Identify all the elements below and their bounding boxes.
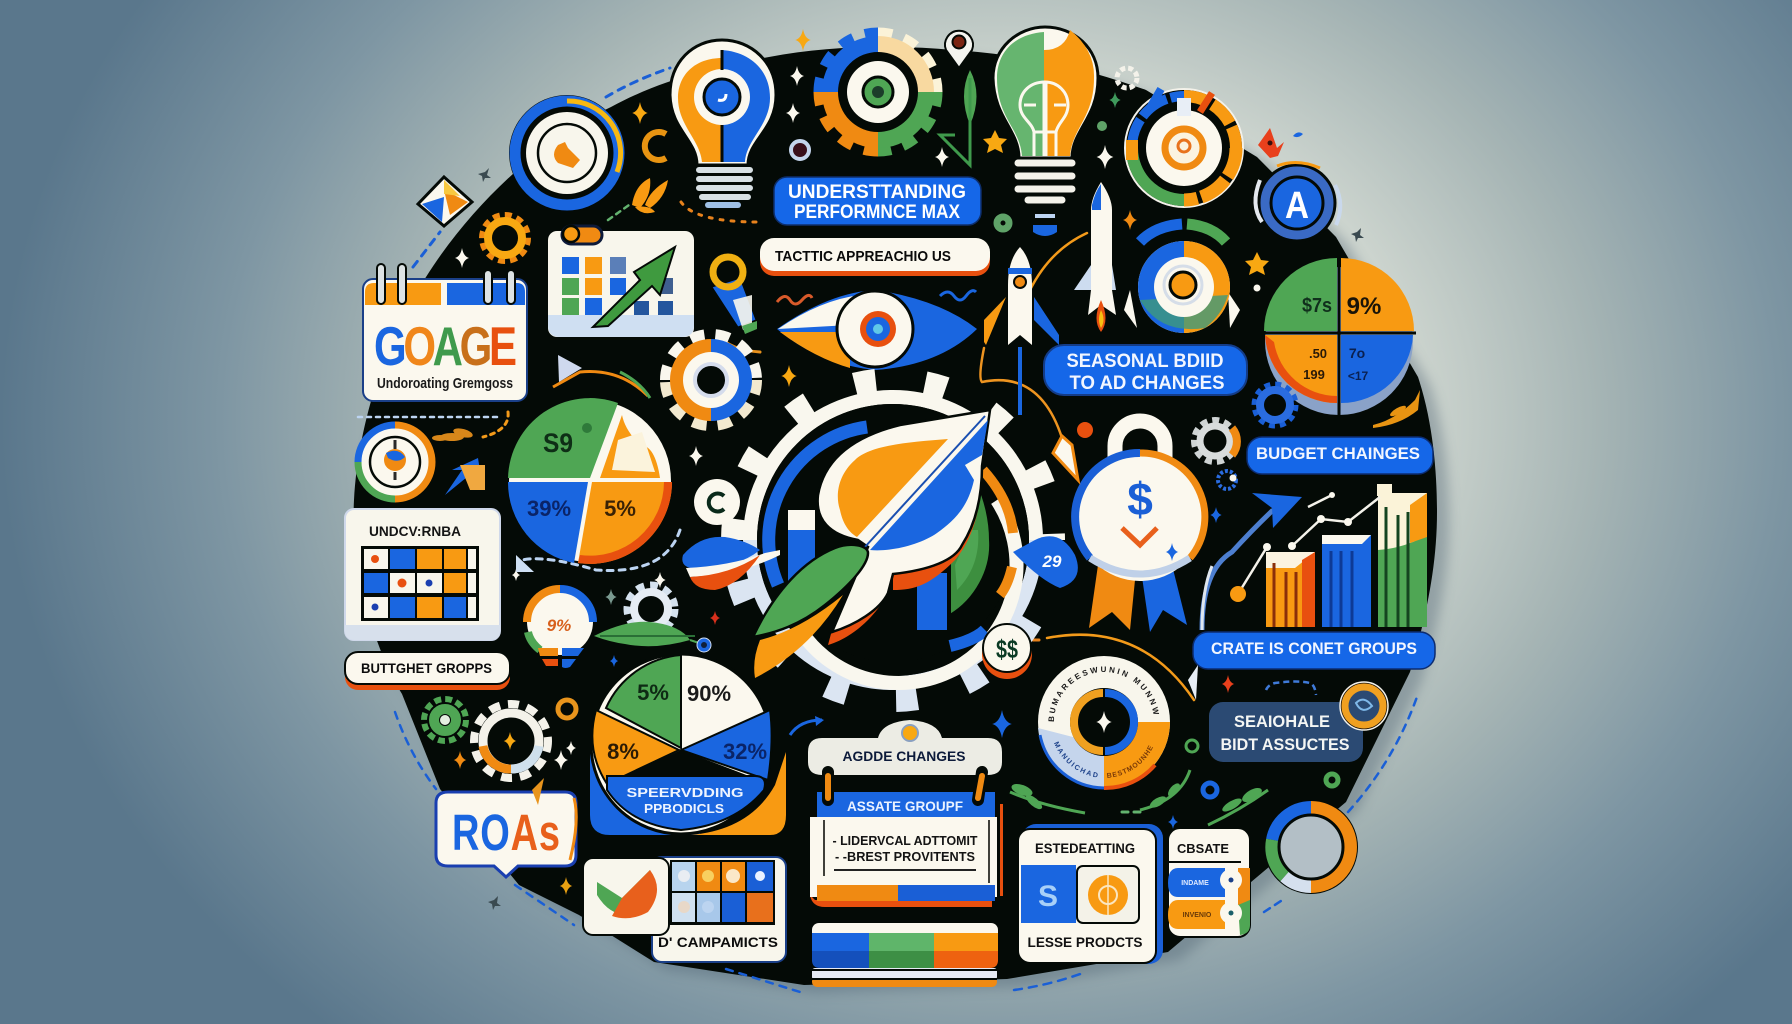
kite body (818, 410, 990, 632)
pie chart: right (1262, 255, 1416, 415)
icon: small rocket (984, 247, 1059, 415)
label: tactic approach: TACTTIC APPREACHIO US (775, 248, 951, 265)
icon: orange sprig left (432, 427, 474, 441)
icon: arrowheads (516, 436, 1198, 735)
panel: estedeating and lesse products: S (1038, 880, 1058, 913)
panel: cbsate: INVENIO (1183, 912, 1212, 919)
icon: orange letter C (645, 132, 666, 160)
panel: campaigns (583, 857, 786, 962)
pie chart: bottom: PPBODICLS (644, 801, 724, 816)
icon: target with arcs (1124, 224, 1240, 333)
panel: google calendar: GOAGE (374, 317, 517, 377)
icon: light bulb orange and blue (670, 40, 776, 205)
pie chart: bottom (590, 654, 786, 835)
kite shadow (893, 468, 982, 590)
panel: cbsate: CBSATE (1177, 841, 1229, 856)
label: seasonal bid (1044, 345, 1247, 395)
pie chart: bottom: 5% (637, 680, 669, 705)
icon: gold stars (983, 130, 1269, 275)
panel: campaigns: D' CAMPAMICTS (658, 934, 778, 950)
blob shadow (362, 55, 1449, 993)
icon: tall rocket (1074, 182, 1116, 332)
icon: A badge (1255, 162, 1340, 241)
callout: ROAs speech bubble (436, 778, 576, 877)
callout: ROAs speech bubble: ROAs (452, 803, 560, 861)
icon: small percentage bulb: 9% (547, 616, 571, 635)
icon: left drop pointer (682, 537, 780, 590)
pie chart: right: <17 (1348, 369, 1369, 383)
label: seasonal bid: SEASONAL BDIID (1066, 351, 1224, 372)
panel: asset group board: - LIDERVCAL ADTTOMIT (832, 833, 978, 848)
icon: tiny dark specks (478, 168, 1364, 910)
icon: red kite marker (1258, 128, 1303, 158)
icon: dollar coin: $$ (996, 634, 1018, 664)
icon: folded kite (418, 177, 472, 226)
pie chart: right: 7o (1349, 345, 1365, 361)
icon: small rings and dots (791, 68, 1338, 797)
label: create asset groups: CRATE IS CONET GROUPS (1211, 639, 1417, 658)
pie chart: bottom: 32% (723, 739, 767, 764)
icon: small percentage bulb (527, 589, 593, 668)
icon: arrow with curve (553, 355, 650, 398)
decorative dashed connectors (358, 68, 1418, 992)
panel: asset group board: - -BREST PROVITENTS (835, 849, 975, 864)
tail leaves (754, 595, 843, 678)
panel: asset group board (810, 772, 1003, 907)
icon: right drop with number: 29 (1042, 552, 1062, 571)
label: seasonal bid assets (1209, 682, 1363, 762)
label: budget changes (1247, 437, 1433, 474)
icon: right drop with number (1013, 536, 1078, 588)
label: agdde changes: AGDDE CHANGES (842, 748, 966, 764)
icon: multicolor gear top (820, 34, 936, 150)
bars behind kite (788, 510, 815, 530)
icon: ribbon medal with dollar lock: $ (1127, 473, 1153, 525)
central emblem: gear with arrow kite (735, 382, 1051, 698)
icon: dial target top right (1125, 89, 1243, 207)
pie chart: right: .50 (1309, 346, 1327, 361)
icon: small squiggles (777, 291, 976, 304)
icon: A badge: A (1285, 185, 1309, 227)
icon: small circle compass (358, 425, 432, 499)
panel: google calendar (363, 268, 527, 401)
icon: ribbon medal with dollar lock (1075, 421, 1205, 632)
icon: orange small ring (558, 700, 576, 718)
icon: blue orange ring top left (509, 95, 625, 211)
icon: wheel with curved labels: BESTMOUNHE (1106, 745, 1153, 778)
heading: understanding performance max (774, 177, 981, 225)
icon: green leaf and check (940, 70, 976, 165)
pie chart: right: $7s (1302, 295, 1332, 317)
icon: orange keyring tag (712, 257, 757, 334)
panel: left table: UNDCV:RNBA (369, 523, 461, 539)
pie chart: left: S9 (543, 428, 573, 458)
panel: schedule table with green arrow (548, 226, 694, 337)
gear teeth and ring (735, 382, 1051, 698)
label: tactic approach (760, 238, 990, 276)
icon: ring bottom right (1264, 800, 1358, 894)
label: seasonal bid: TO AD CHANGES (1070, 373, 1224, 394)
panel: estedeating and lesse products (1018, 824, 1163, 964)
icon: sparkles and stars (454, 29, 1234, 895)
panel: cbsate (1168, 828, 1250, 937)
pie chart: bottom: SPEERVDDING (626, 785, 744, 800)
label: seasonal bid assets: BIDT ASSUCTES (1220, 735, 1350, 754)
label: agdde changes (808, 720, 1002, 775)
icon: stylized eye (777, 290, 977, 370)
icon: light bulb green and orange (993, 27, 1098, 236)
pie chart: bottom: 90% (687, 681, 731, 706)
panel: cbsate: INDAME (1181, 880, 1209, 887)
pie chart: right: 199 (1303, 367, 1325, 382)
pie chart: bottom: 8% (607, 739, 639, 764)
icon: green gear (424, 699, 466, 741)
icon: orange sprig (632, 178, 668, 213)
icon: wheel with curved labels (1038, 656, 1170, 790)
icon: small orange gear (482, 215, 528, 261)
chart: bars and trend line (1202, 484, 1427, 630)
icon: dollar coin (982, 624, 1032, 679)
icon: gold ring (1340, 682, 1388, 730)
icon: small blue arrows (445, 458, 485, 495)
icon: wheel with curved labels: MANUICHAD (1054, 741, 1098, 778)
icon: blue and grey gears (1194, 384, 1296, 489)
label: budget groups: BUTTGHET GROPPS (361, 660, 492, 676)
icon: orange sprig right (1373, 390, 1420, 428)
icon: map pin (945, 31, 973, 68)
panel: estedeating and lesse products: ESTEDEATTING (1035, 840, 1135, 856)
pie chart: right: 9% (1347, 293, 1381, 320)
label: seasonal bid assets: SEAIOHALE (1234, 712, 1330, 731)
heading: understanding performance max: PERFORMNCE MAX (794, 202, 960, 223)
icon: green vine sprigs (1010, 740, 1268, 825)
icon: C badge on gear (694, 479, 740, 525)
pie chart: left: 39% (527, 496, 571, 521)
panel: google calendar: Undoroating Gremgoss (377, 375, 513, 392)
central black circular backdrop (354, 47, 1437, 985)
panel: left table (345, 509, 500, 640)
heading: understanding performance max: UNDERSTTANDING (788, 182, 966, 203)
icon: white blue orange gear (666, 335, 756, 425)
icon: white orange gear with star (474, 704, 548, 778)
label: create asset groups (1193, 632, 1435, 669)
label: budget changes: BUDGET CHAINGES (1256, 444, 1420, 463)
icon: wheel with curved labels: BUMAREESWUNIN MUNNW (1048, 666, 1160, 722)
icon: stacked color bar (812, 923, 998, 987)
pie chart: left: 5% (604, 496, 636, 521)
panel: asset group board: ASSATE GROUPF (847, 798, 963, 814)
pie chart: left (508, 398, 672, 564)
panel: estedeating and lesse products: LESSE PRODCTS (1028, 934, 1142, 950)
label: budget groups (345, 652, 510, 690)
icon: white gear with green leaf (594, 585, 711, 652)
